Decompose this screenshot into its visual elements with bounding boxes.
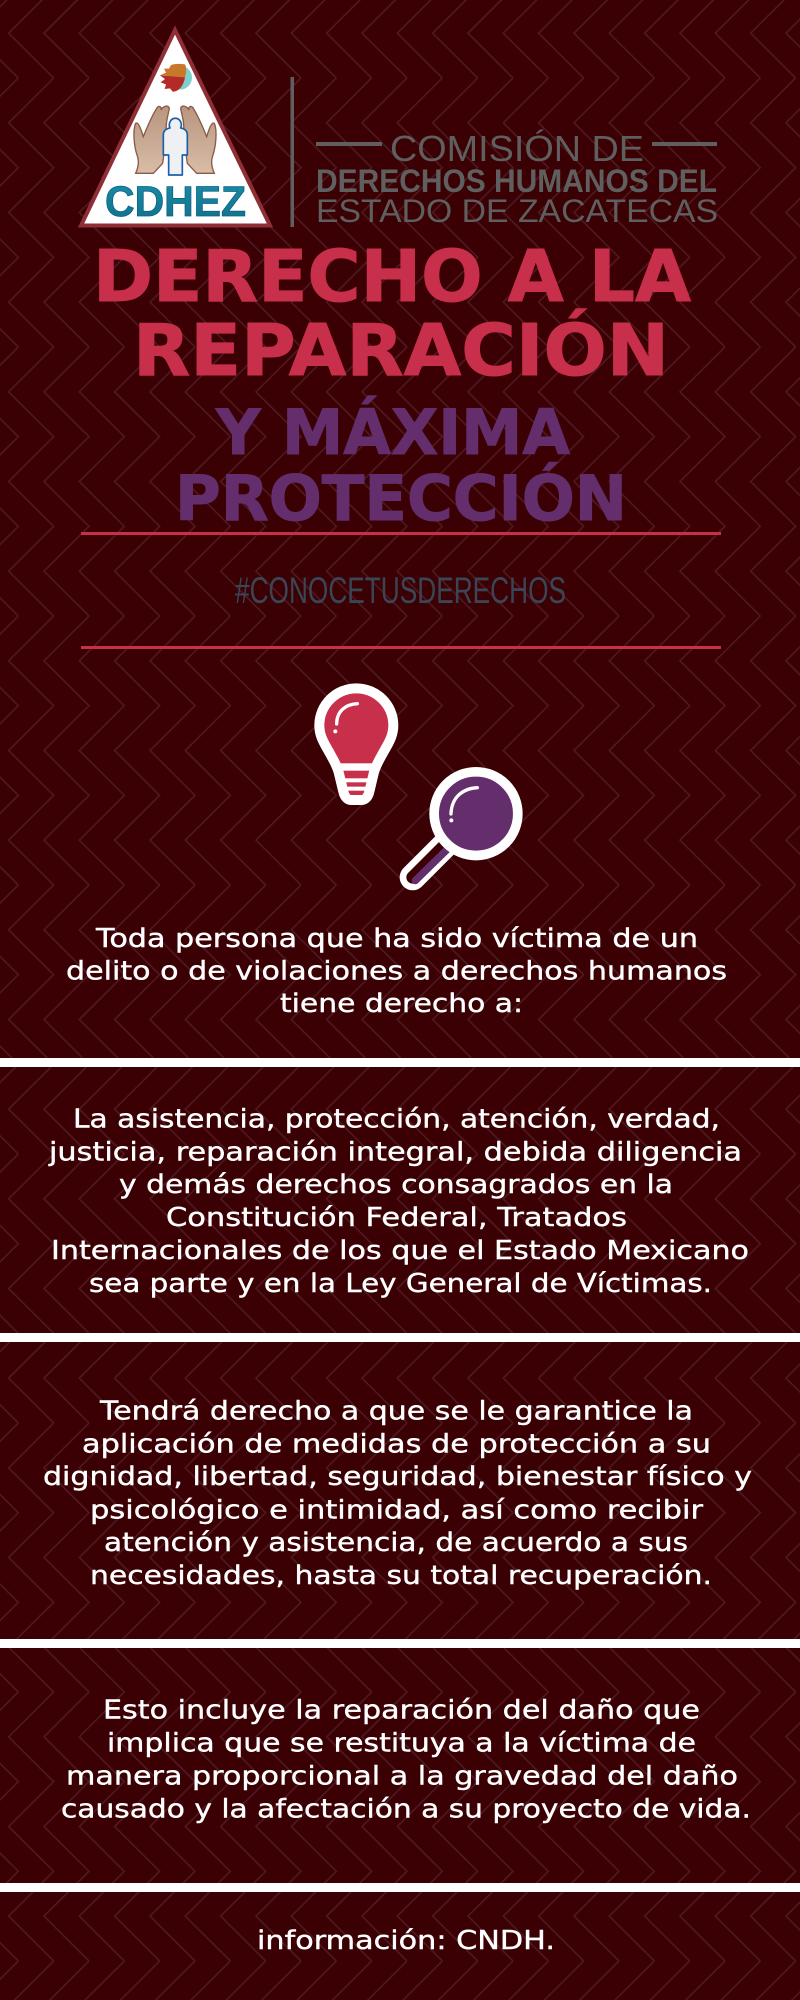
icon: sun emblem xyxy=(160,64,192,92)
title: PROTECCIÓN xyxy=(175,462,627,535)
panel: rights: Constitución Federal, Tratados xyxy=(166,1203,627,1233)
panel: damage reparation: Esto incluye la reparación del daño que xyxy=(103,1696,700,1726)
intro text: tiene derecho a: xyxy=(280,989,523,1019)
panel: protection measures: psicológico e intimidad, así como recibir xyxy=(90,1496,703,1526)
panel: protection measures: aplicación de medidas de protección a su xyxy=(82,1430,711,1460)
intro text: delito o de violaciones a derechos humanos xyxy=(66,956,727,986)
institution name: ESTADO DE ZACATECAS xyxy=(316,193,718,229)
institution name xyxy=(316,128,718,229)
icon: magnifying glass xyxy=(413,772,518,881)
logo wordmark: CDHEZ xyxy=(105,178,246,226)
panel: rights: sea parte y en la Ley General de Víctimas. xyxy=(89,1269,712,1299)
panel: rights: y demás derechos consagrados en la xyxy=(119,1170,673,1200)
title: DERECHO A LA xyxy=(93,235,691,318)
title xyxy=(93,235,691,535)
title: REPARACIÓN xyxy=(133,309,669,392)
panel: damage reparation xyxy=(61,1696,751,1824)
hashtag: #CONOCETUSDERECHOS xyxy=(235,569,566,611)
panel: rights xyxy=(48,1104,749,1299)
icon: human figure xyxy=(163,118,187,175)
panel: damage reparation: manera proporcional a la gravedad del daño xyxy=(66,1762,738,1792)
title: Y MÁXIMA xyxy=(215,396,570,469)
source credit: información: CNDH. xyxy=(257,1926,555,1956)
icon: light bulb xyxy=(319,688,393,800)
panel: rights: La asistencia, protección, atención, verdad, xyxy=(73,1104,720,1134)
panel: damage reparation: implica que se restituya a la víctima de xyxy=(107,1728,696,1758)
logo: CDHEZ triangle xyxy=(81,30,270,226)
panel: protection measures: necesidades, hasta su total recuperación. xyxy=(90,1561,712,1591)
icon: sheltering hands xyxy=(134,106,216,173)
panel: protection measures xyxy=(43,1396,752,1591)
institution name: COMISIÓN DE xyxy=(390,128,644,169)
panel: protection measures: dignidad, libertad, seguridad, bienestar físico y xyxy=(43,1462,752,1492)
panel: damage reparation: causado y la afectación a su proyecto de vida. xyxy=(61,1794,751,1824)
panel: protection measures: atención y asistencia, de acuerdo a sus xyxy=(104,1528,688,1558)
panel: protection measures: Tendrá derecho a que se le garantice la xyxy=(99,1396,693,1426)
institution name: DERECHOS HUMANOS DEL xyxy=(316,163,717,199)
logo divider xyxy=(290,77,294,227)
panel: rights: justicia, reparación integral, debida diligencia xyxy=(48,1138,742,1168)
intro text xyxy=(66,924,727,1019)
panel: rights: Internacionales de los que el Estado Mexicano xyxy=(51,1236,749,1266)
intro text: Toda persona que ha sido víctima de un xyxy=(95,924,698,954)
